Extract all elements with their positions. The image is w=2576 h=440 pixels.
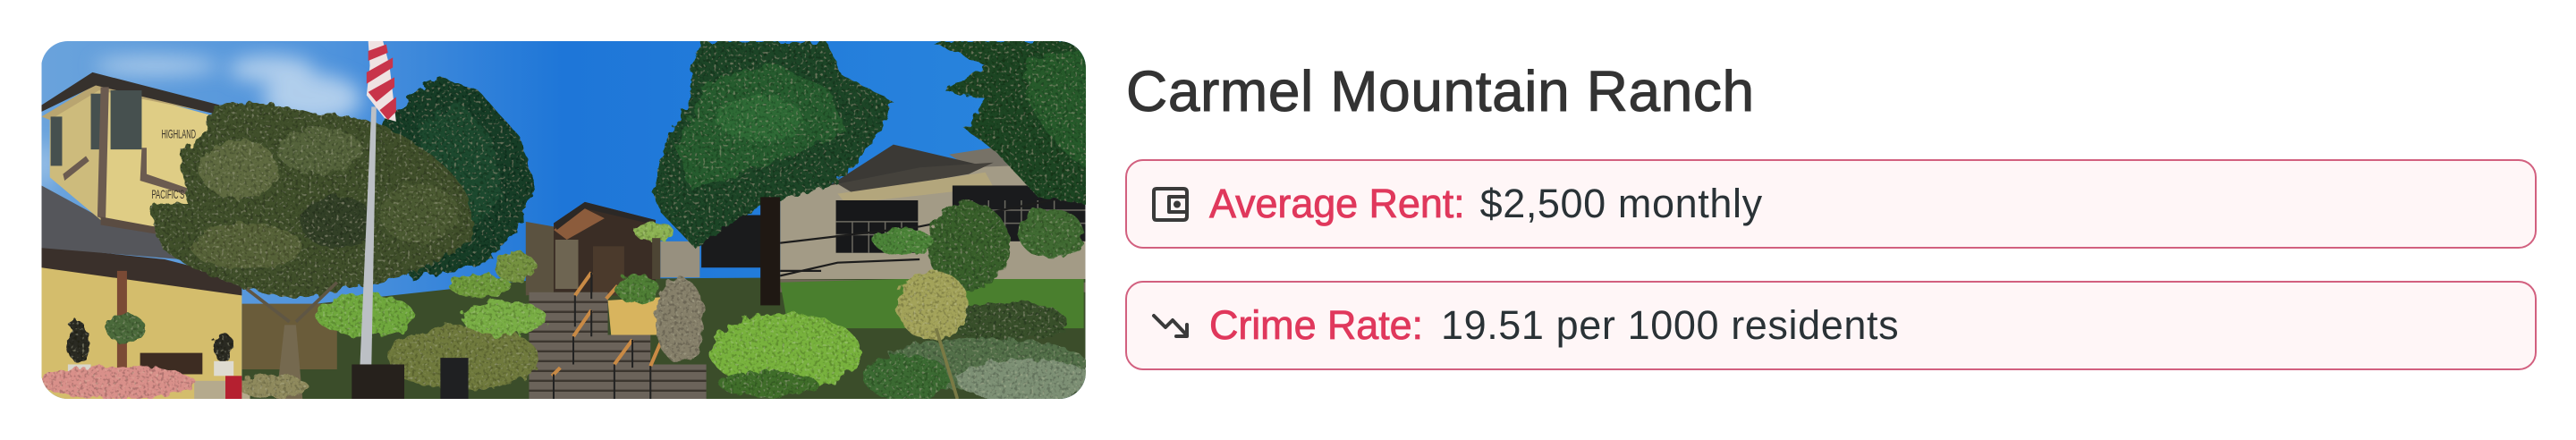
panel: average rent — [1125, 159, 2537, 249]
stairs — [529, 273, 707, 399]
sign text: Highland: HIGHLAND — [161, 127, 196, 140]
flag — [367, 41, 396, 122]
stat: average rent value: Average Rent: $2,500 monthly — [1209, 181, 1763, 226]
sign text: Pacific's: PACIFIC'S — [151, 188, 184, 201]
magnolia tree — [148, 103, 475, 299]
panel: crime rate — [1125, 281, 2537, 370]
planters, bench and pink flowers — [42, 314, 308, 399]
flag pole — [360, 106, 377, 364]
right cypress tree — [931, 41, 1092, 205]
foreground garden right — [709, 202, 1095, 402]
clouds — [38, 56, 361, 187]
lawn — [780, 279, 1084, 328]
big pine tree — [654, 41, 894, 248]
photo: resort lodge with trees and stairs — [41, 41, 1086, 399]
title: Carmel Mountain Ranch — [1126, 59, 1755, 123]
right stone building — [660, 145, 1085, 292]
icon: wallet — [1152, 187, 1189, 222]
stat: crime rate value: Crime Rate: 19.51 per 1000 residents — [1209, 302, 1899, 348]
icon: trending down — [1152, 313, 1190, 338]
ground base — [242, 275, 1085, 399]
sign and bin — [352, 358, 469, 399]
centre lodge — [526, 202, 656, 295]
ferns and shrubs by the stairs — [316, 222, 705, 391]
building: left lodge — [42, 72, 337, 399]
dark tree behind flag — [383, 76, 536, 279]
